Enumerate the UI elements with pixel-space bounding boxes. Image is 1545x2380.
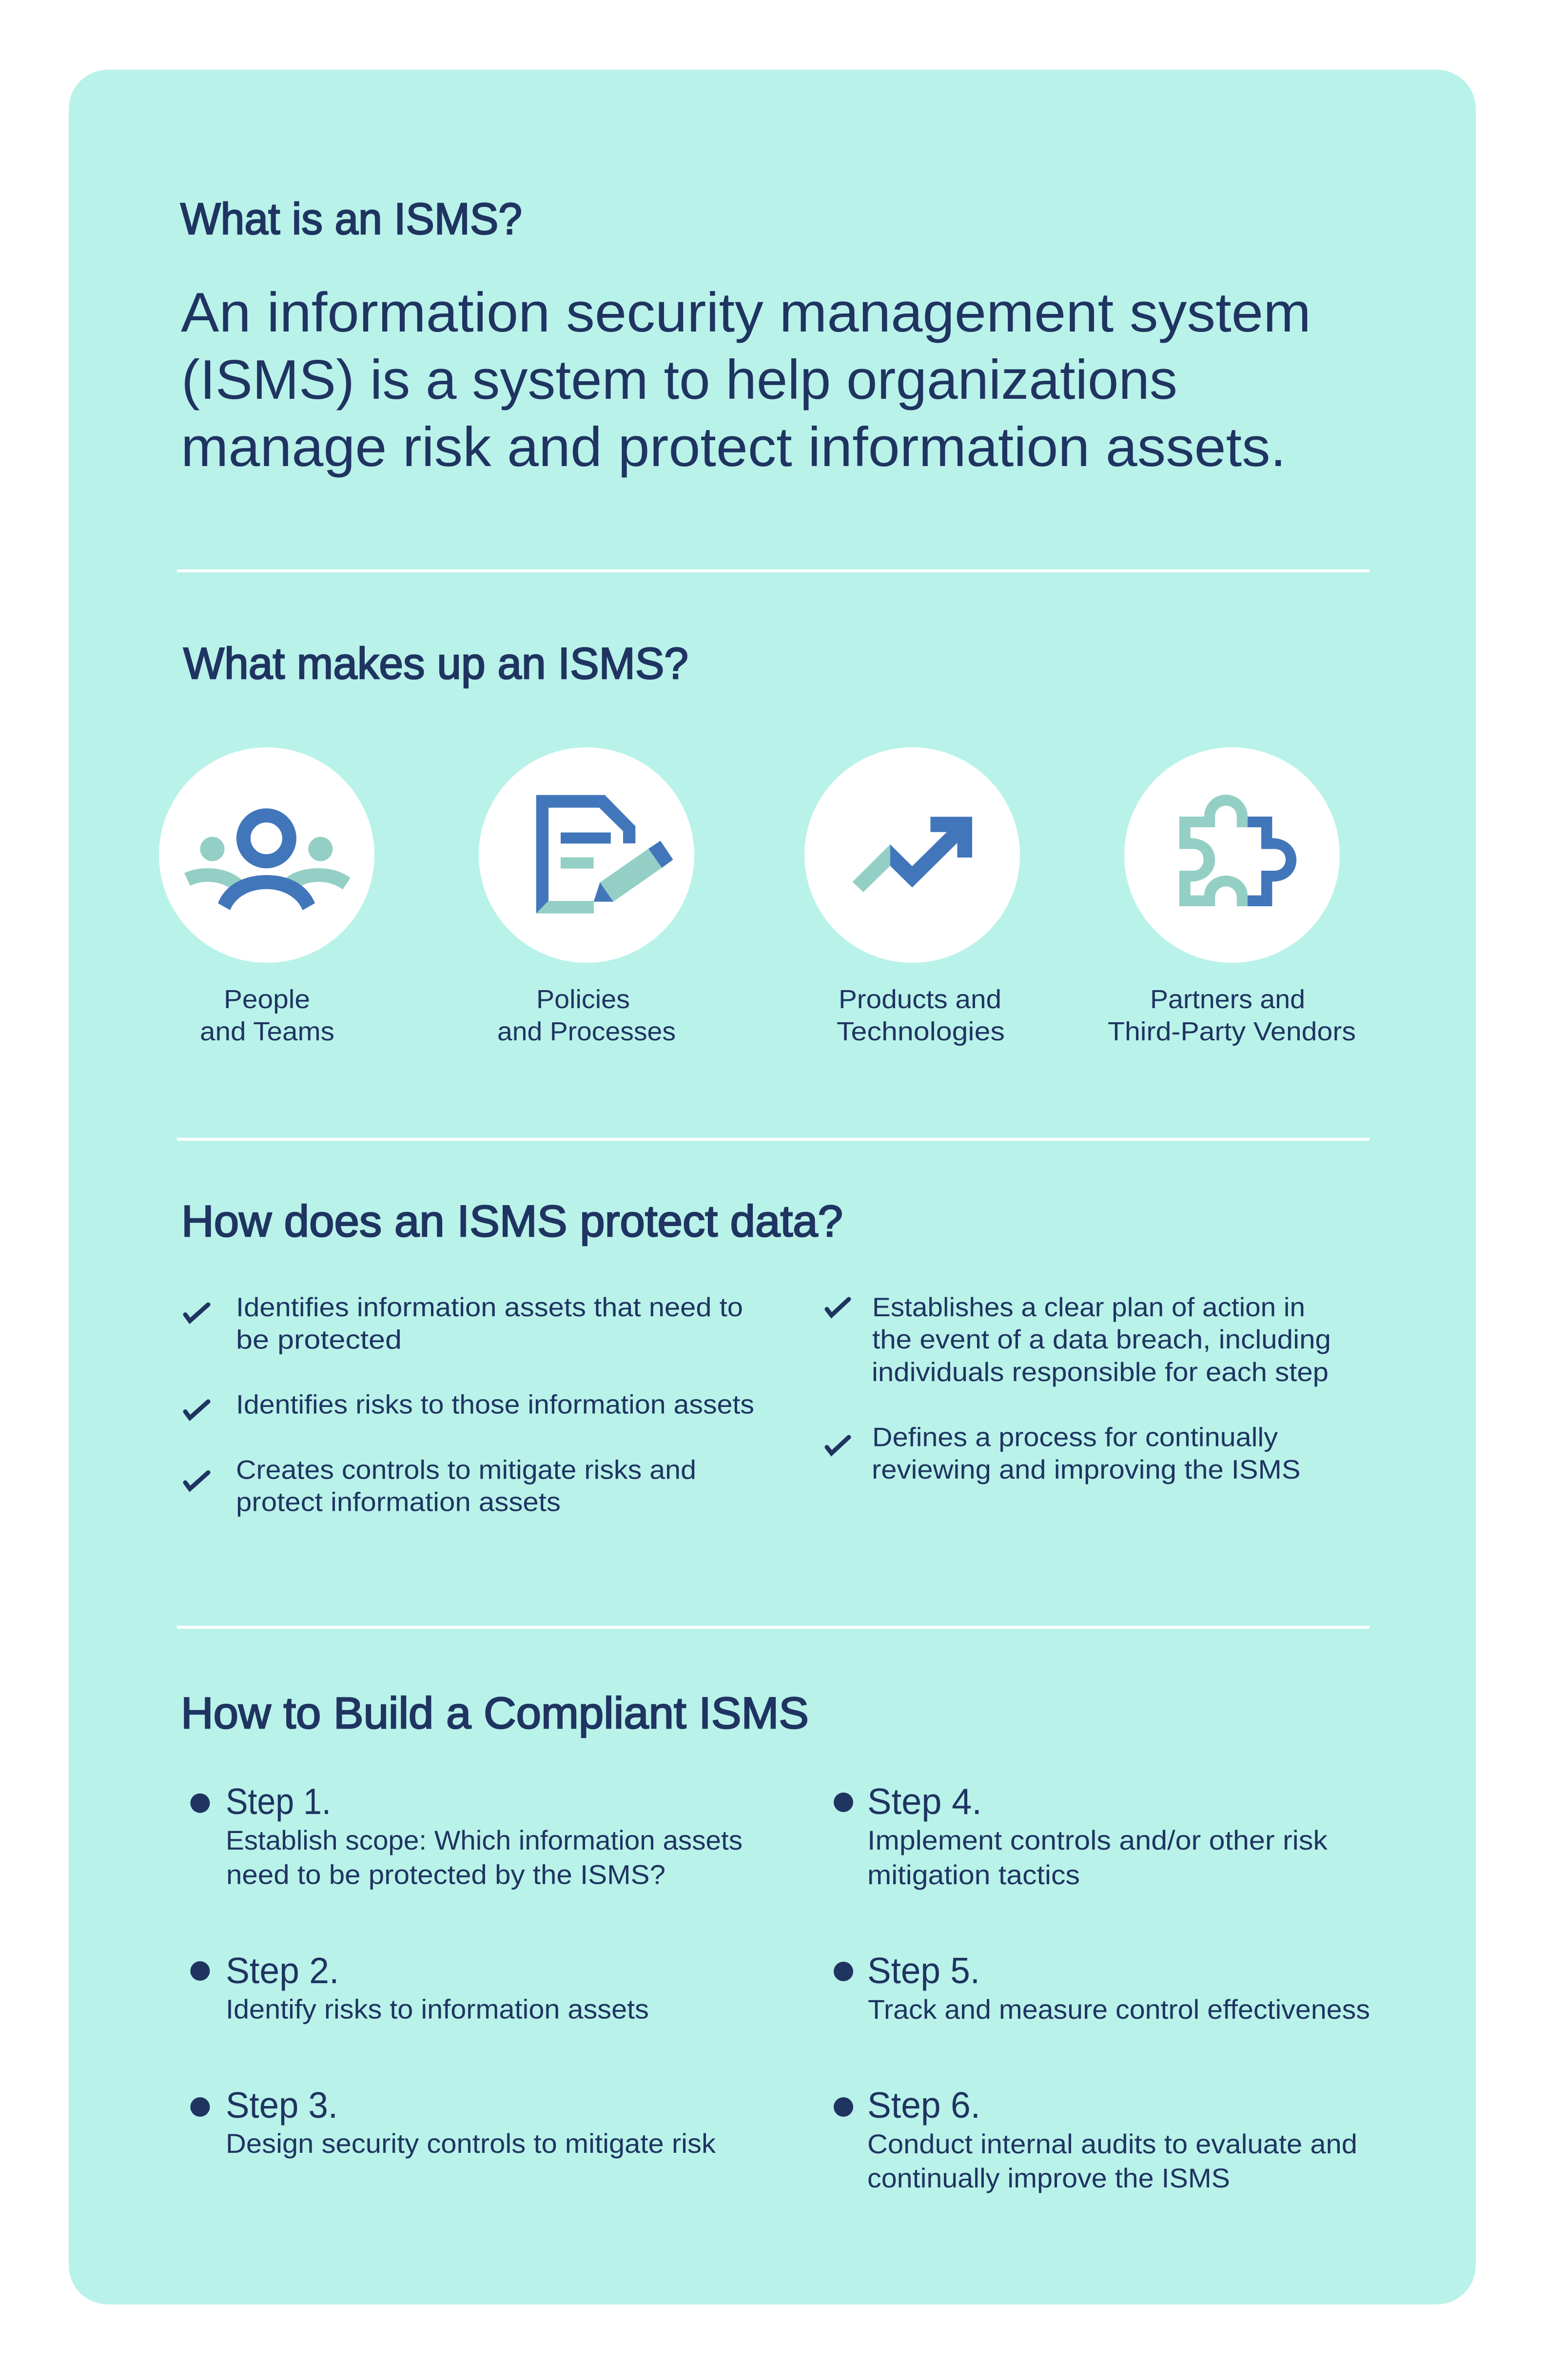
heading: What makes up an ISMS?: What makes up an ISMS? — [183, 639, 688, 688]
text block: definition: manage risk and protect information assets. — [181, 416, 1286, 478]
text: establishes a plan: the event of a data breach, including — [872, 1324, 1331, 1354]
text: establishes a plan — [872, 1292, 1331, 1387]
label: Policies and Processes — [497, 985, 676, 1046]
step 4 — [834, 1781, 1328, 1890]
section: what makes up an ISMS — [159, 639, 1356, 1046]
heading: How does an ISMS protect data?: How does an ISMS protect data? — [181, 1197, 843, 1246]
step 3 — [190, 2085, 716, 2159]
label: People and Teams — [200, 985, 334, 1046]
step 6 description: Conduct internal audits to evaluate and — [867, 2128, 1357, 2159]
bullet — [190, 2097, 210, 2117]
step 6 — [834, 2085, 1357, 2193]
step 3 title: Step 3. — [226, 2085, 338, 2126]
label: Policies and Processes: and Processes — [497, 1017, 676, 1046]
label: Products and Technologies — [837, 985, 1005, 1046]
step 5 description: Track and measure control effectiveness — [868, 1994, 1370, 2025]
checklist item 2 — [185, 1389, 754, 1420]
text: defines a process: Defines a process for continually — [872, 1422, 1278, 1452]
step 4 description — [867, 1825, 1328, 1890]
step 6 description — [867, 2128, 1357, 2193]
step 5 — [834, 1950, 1370, 2025]
text: identifies information assets — [236, 1292, 743, 1354]
text: establishes a plan: individuals responsible for each step — [872, 1357, 1329, 1387]
icon: people — [159, 747, 374, 963]
step 2 description: Identify risks to information assets — [226, 1994, 649, 2025]
text: identifies information assets: Identifies information assets that need to — [236, 1292, 743, 1322]
icon: check mark — [185, 1402, 208, 1418]
checklist item 4 — [827, 1292, 1331, 1387]
icon: check mark — [185, 1472, 208, 1489]
icon: check mark — [827, 1299, 849, 1315]
label: People and Teams: and Teams — [200, 1017, 334, 1046]
step 5 title: Step 5. — [867, 1950, 980, 1991]
checklist item 5 — [827, 1422, 1301, 1484]
bullet — [190, 1961, 210, 1981]
step 1 description: Establish scope: Which information assets — [226, 1825, 743, 1855]
label: Policies and Processes: Policies — [536, 985, 630, 1014]
step 1 description — [226, 1825, 743, 1890]
heading: How to Build a Compliant ISMS: How to Build a Compliant ISMS — [181, 1689, 809, 1738]
text block: definition: (ISMS) is a system to help organizations — [181, 349, 1177, 411]
text: identifies information assets: be protected — [236, 1324, 402, 1354]
icon: check mark — [185, 1305, 208, 1321]
text block: definition — [181, 282, 1311, 478]
icon: trend arrow — [804, 747, 1020, 963]
icon: check mark — [827, 1437, 849, 1453]
item: people and teams — [159, 747, 374, 1046]
text: defines a process — [872, 1422, 1301, 1484]
step 4 description: mitigation tactics — [867, 1859, 1080, 1890]
text: establishes a plan: Establishes a clear plan of action in — [872, 1292, 1305, 1322]
step 6 title: Step 6. — [867, 2085, 980, 2126]
step 1 title: Step 1. — [226, 1781, 331, 1822]
text: creates controls: protect information assets — [236, 1487, 561, 1517]
text: identifies risks: Identifies risks to those information assets — [236, 1389, 754, 1420]
item: policies and processes — [479, 747, 694, 1046]
heading: What is an ISMS?: What is an ISMS? — [180, 195, 522, 244]
item: partners and vendors — [1108, 747, 1356, 1046]
icon: puzzle piece — [1124, 747, 1340, 963]
text: creates controls: Creates controls to mitigate risks and — [236, 1455, 696, 1485]
label: Partners and Third-Party Vendors — [1108, 985, 1356, 1046]
bullet — [834, 1793, 853, 1812]
bullet — [834, 1962, 853, 1981]
label: Products and Technologies: Technologies — [837, 1017, 1005, 1046]
checklist item 1 — [185, 1292, 743, 1354]
step 4 description: Implement controls and/or other risk — [867, 1825, 1328, 1855]
text: defines a process: reviewing and improving the ISMS — [872, 1454, 1301, 1484]
step 1 description: need to be protected by the ISMS? — [226, 1859, 665, 1890]
section: how to build a compliant ISMS — [181, 1689, 1370, 2193]
icon: document and pencil — [479, 747, 694, 963]
text block: definition: An information security management system — [181, 282, 1311, 344]
step 2 — [190, 1950, 649, 2025]
step 4 title: Step 4. — [867, 1781, 982, 1822]
section: how does an ISMS protect data — [181, 1197, 1331, 1517]
text: creates controls — [236, 1455, 696, 1517]
step 3 description: Design security controls to mitigate risk — [226, 2128, 716, 2159]
bullet — [190, 1794, 210, 1813]
label: Partners and Third-Party Vendors: Partners and — [1150, 985, 1305, 1014]
label: People and Teams: People — [224, 985, 310, 1014]
step 6 description: continually improve the ISMS — [867, 2163, 1230, 2193]
bullet — [834, 2097, 853, 2117]
label: Partners and Third-Party Vendors: Third-Party Vendors — [1108, 1017, 1356, 1046]
label: Products and Technologies: Products and — [839, 985, 1001, 1014]
section: what is an ISMS — [180, 195, 1311, 478]
checklist item 3 — [185, 1455, 696, 1517]
step 2 title: Step 2. — [226, 1950, 339, 1991]
step 1 — [190, 1781, 743, 1890]
item: products and technologies — [804, 747, 1020, 1046]
